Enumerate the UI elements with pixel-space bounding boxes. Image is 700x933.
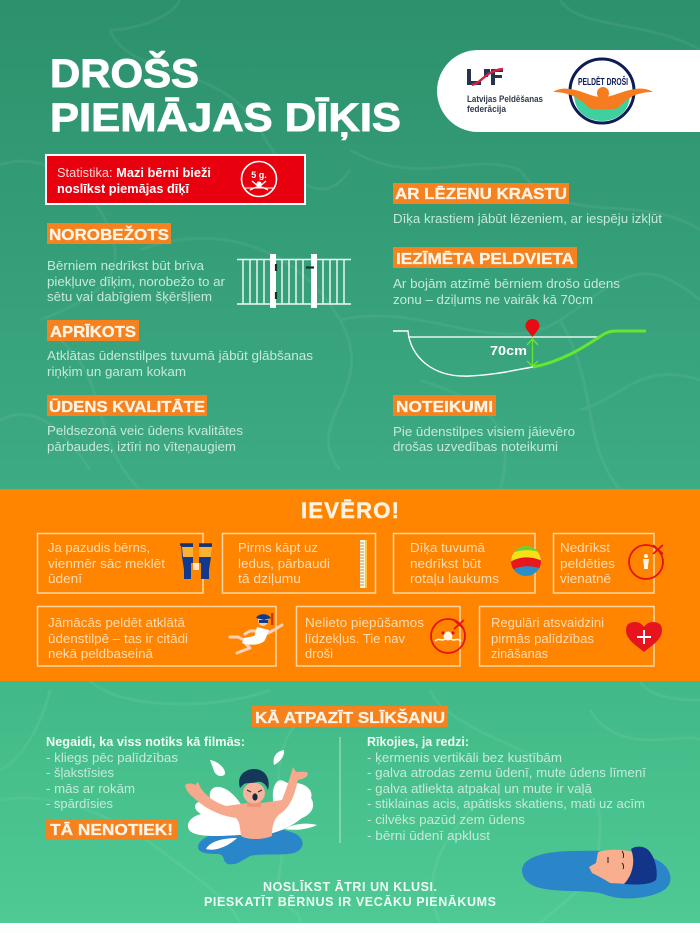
icon: no inflatables <box>431 619 465 653</box>
text: Ūdens kvalitāte: Peldsezonā veic ūdens kvalitātes <box>47 423 243 438</box>
card: lost child: vienmēr sāc meklēt <box>48 556 165 571</box>
icon: heart <box>626 622 662 652</box>
card: playground: rotaļu laukums <box>410 571 500 586</box>
card: no inflatables: droši <box>305 646 333 661</box>
text: film expectations list: - spārdīsies <box>46 796 113 811</box>
panel: Ievēro <box>0 489 700 681</box>
icon: age 5: 5 g. <box>251 170 267 180</box>
text: Iezīmēta peldvieta <box>393 276 621 307</box>
closing statement: NOSLĪKST ĀTRI UN KLUSI. <box>263 880 437 894</box>
text: Norobežots: sētu vai dabīgiem šķēršļiem <box>47 289 212 304</box>
icon: red buoy <box>526 319 540 337</box>
heading: Noteikumi: NOTEIKUMI <box>396 399 493 416</box>
card: ice: Pirms kāpt uz <box>238 540 318 555</box>
heading: Kā atpazīt slīkšanu: KĀ ATPAZĪT SLĪKŠANU <box>255 708 445 727</box>
card: no inflatables: līdzekļus. Tie nav <box>305 631 405 646</box>
card: playground: Dīķa tuvumā <box>410 540 486 555</box>
heading: Ievēro: IEVĒRO! <box>301 498 399 523</box>
callout: statistics: Statistika: Mazi bērni bieži <box>57 165 211 180</box>
text: warning signs list <box>367 734 646 843</box>
callout: statistics: noslīkst piemājas dīķī <box>57 181 189 196</box>
panel: top water background <box>0 0 700 490</box>
card: not alone: peldēties <box>560 556 616 571</box>
icon: no swimming alone <box>629 545 663 579</box>
text: Noteikumi <box>393 424 575 454</box>
text: Iezīmēta peldvieta: zonu – dziļums ne vairāk kā 70cm <box>393 292 593 307</box>
card: playground <box>394 534 542 593</box>
chart: depth diagram <box>393 319 646 376</box>
closing statement: PIESKATĪT BĒRNUS IR VECĀKU PIENĀKUMS <box>204 895 496 909</box>
text: Aprīkots: Atklātas ūdenstilpes tuvumā jābūt glābšanas <box>47 348 314 363</box>
card: learn to swim: nekā peldbaseinā <box>48 646 154 661</box>
text: film expectations list <box>46 734 245 811</box>
card: first aid: zināšanas <box>491 646 548 661</box>
text: Iezīmēta peldvieta: Ar bojām atzīmē bērniem drošo ūdens <box>393 276 621 291</box>
text: film expectations list: - šļakstīsies <box>46 765 114 780</box>
text: Noteikumi: Pie ūdenstilpes visiem jāievēro <box>393 424 575 439</box>
icon: age 5 <box>242 162 276 196</box>
text: Ūdens kvalitāte <box>47 423 243 454</box>
icon: ruler <box>360 540 367 588</box>
text: Norobežots <box>47 258 226 304</box>
card: learn to swim: ūdenstilpē – tas ir citādi <box>48 631 188 646</box>
divider <box>339 737 341 843</box>
icon: binoculars <box>180 544 212 579</box>
card: lost child <box>38 534 212 593</box>
text: warning signs list: - galva atrodas zemu ūdenī, mute ūdens līmenī <box>367 765 646 780</box>
card: not alone <box>554 534 663 593</box>
text: warning signs list: - bērni ūdenī apklust <box>367 828 490 843</box>
heading: Aprīkots: APRĪKOTS <box>50 322 136 341</box>
child head <box>243 782 265 804</box>
logo: Peldēt droši <box>553 59 653 123</box>
card: first aid <box>480 606 662 666</box>
illustration: head at water level <box>522 847 670 898</box>
heading: Iezīmēta peldvieta: IEZĪMĒTA PELDVIETA <box>396 249 574 268</box>
text: Ar lēzenu krastu: Dīķa krastiem jābūt lēzeniem, ar iespēju izkļūt <box>393 211 662 226</box>
water pool <box>198 827 303 864</box>
card: first aid: pirmās palīdzības <box>491 631 594 646</box>
heading: Ar lēzenu krastu: AR LĒZENU KRASTU <box>395 184 567 203</box>
logo: LPF federation: federācija <box>467 104 507 114</box>
illustration: splashing child <box>185 750 317 864</box>
logo: Peldēt droši: PELDĒT DROŠI <box>578 75 628 88</box>
card: ice: ledus, pārbaudi <box>238 556 330 571</box>
text: warning signs list: Rīkojies, ja redzi: <box>367 734 469 749</box>
text: warning signs list: - cilvēks pazūd zem ūdens <box>367 812 526 827</box>
card: learn to swim: Jāmācās peldēt atklātā <box>48 615 186 630</box>
text: warning signs list: - ķermenis vertikāli bez kustībām <box>367 750 562 765</box>
icon: ball <box>511 546 541 576</box>
card: learn to swim <box>38 606 282 666</box>
text: Noteikumi: drošas uzvedības noteikumi <box>393 439 558 454</box>
child body <box>185 767 308 839</box>
closing statement <box>204 880 496 909</box>
text: warning signs list: - galva atliekta atpakaļ un mute ir vaļā <box>367 781 593 796</box>
card: lost child: ūdenī <box>48 571 82 586</box>
heading: Ūdens kvalitāte: ŪDENS KVALITĀTE <box>49 397 205 416</box>
panel: logos <box>437 50 700 132</box>
heading: Norobežots: NOROBEŽOTS <box>49 225 169 244</box>
panel: bottom water background <box>0 681 700 923</box>
depth label: 70cm <box>490 344 527 358</box>
icon: swimmer <box>230 613 282 653</box>
card: first aid: Regulāri atsvaidzini <box>491 615 604 630</box>
card: no inflatables: Nelieto piepūšamos <box>305 615 425 630</box>
text: warning signs list: - stiklainas acis, apātisks skatiens, mati uz acīm <box>367 796 645 811</box>
card: not alone: vienatnē <box>560 571 611 586</box>
card: lost child: Ja pazudis bērns, <box>48 540 150 555</box>
title: PIEMĀJAS DĪĶIS <box>50 96 401 140</box>
card: ice: tā dziļumu <box>238 571 301 586</box>
heading: Tā nenotiek: TĀ NENOTIEK! <box>50 820 173 839</box>
white splash <box>188 780 313 836</box>
text: film expectations list: - mās ar rokām <box>46 781 135 796</box>
text: Aprīkots <box>47 348 314 379</box>
card: playground: nedrīkst būt <box>410 556 481 571</box>
text: Norobežots: piekļuve dīķim, norobežo to ar <box>47 274 226 289</box>
text: film expectations list: Negaidi, ka viss notiks kā filmās: <box>46 734 245 749</box>
text: Norobežots: Bērniem nedrīkst būt brīva <box>47 258 205 273</box>
card: ice <box>222 534 376 593</box>
title <box>50 50 401 140</box>
logo: LPF federation <box>467 69 543 114</box>
icon: fence with gate <box>237 254 351 308</box>
text: Ūdens kvalitāte: pārbaudes, iztīri no vīteņaugiem <box>47 439 236 454</box>
text: film expectations list: - kliegs pēc palīdzības <box>46 750 179 765</box>
callout: statistics <box>46 155 305 204</box>
title: DROŠS <box>50 50 199 96</box>
panel: bottom white strip <box>0 923 700 933</box>
card: not alone: Nedrīkst <box>560 540 610 555</box>
text: Aprīkots: riņķim un garam kokam <box>47 364 186 379</box>
card: no inflatables <box>296 606 465 666</box>
logo: LPF federation: Latvijas Peldēšanas <box>467 94 543 104</box>
